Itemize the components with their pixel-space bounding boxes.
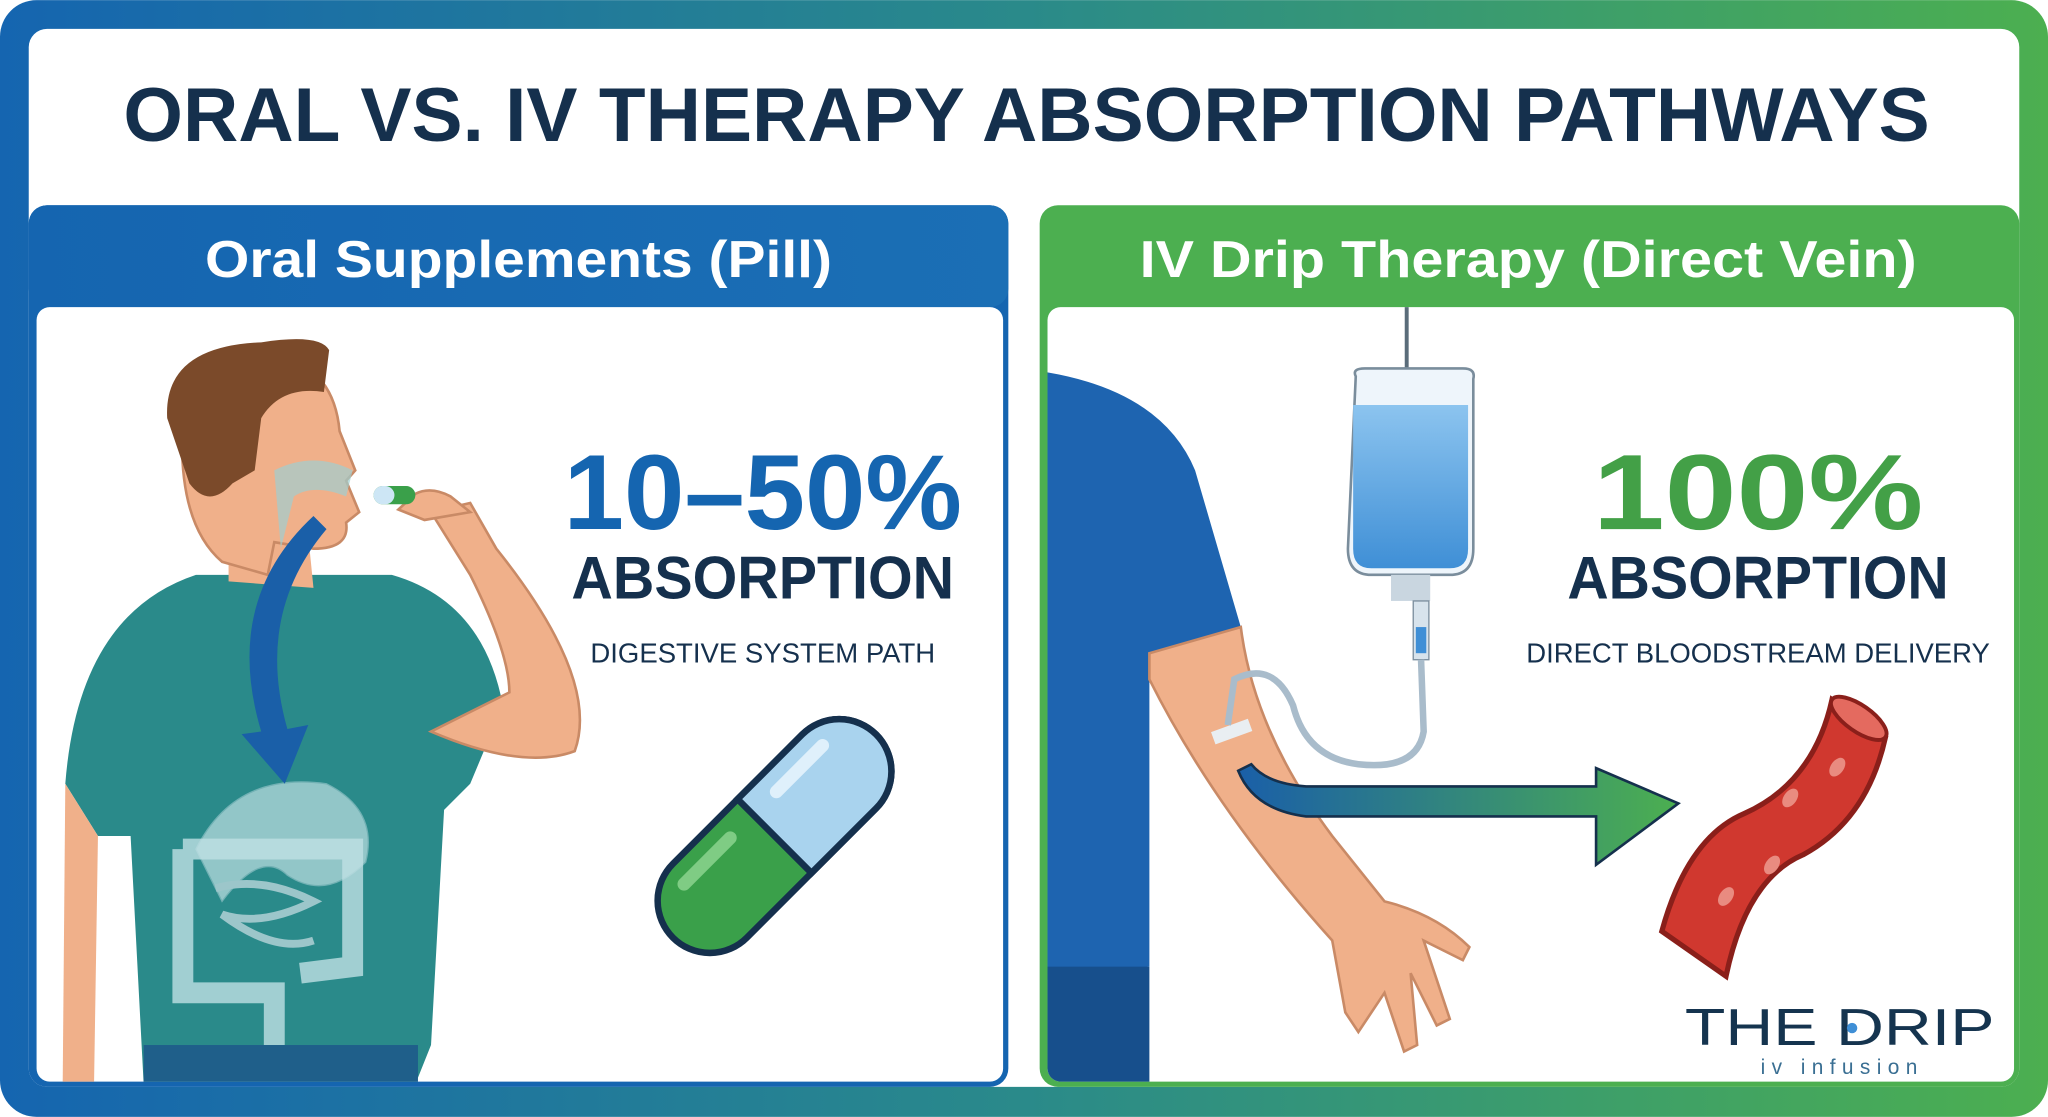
logo: iv infusion (1761, 1056, 1917, 1079)
caption: digestive: DIGESTIVE SYSTEM PATH (590, 637, 935, 668)
label: absorption: ABSORPTION (1567, 544, 1949, 611)
stat: 100%: 100% (1593, 432, 1923, 552)
logo: THE DRIP (1685, 999, 1994, 1057)
illustration: arm (1048, 372, 1469, 1084)
illustration: man taking pill (63, 339, 580, 1084)
caption: direct: DIRECT BLOODSTREAM DELIVERY (1526, 637, 1990, 668)
panel: oral supplements (29, 205, 1008, 1087)
arrow: bloodstream (1238, 764, 1678, 865)
heading: iv: IV Drip Therapy (Direct Vein) (1140, 231, 1917, 289)
heading: oral: Oral Supplements (Pill) (205, 231, 832, 289)
label: absorption: ABSORPTION (571, 544, 954, 611)
arrow: digestive path (242, 516, 327, 784)
title: ORAL VS. IV THERAPY ABSORPTION PATHWAYS (123, 73, 1930, 158)
logo (1685, 999, 1994, 1079)
icon: capsule (636, 698, 913, 975)
icon: blood vessel (1648, 676, 1906, 982)
stat: 10-50%: 10–50% (564, 432, 962, 552)
panel: IV drip (1040, 205, 2019, 1087)
icon: IV bag (1228, 307, 1474, 765)
